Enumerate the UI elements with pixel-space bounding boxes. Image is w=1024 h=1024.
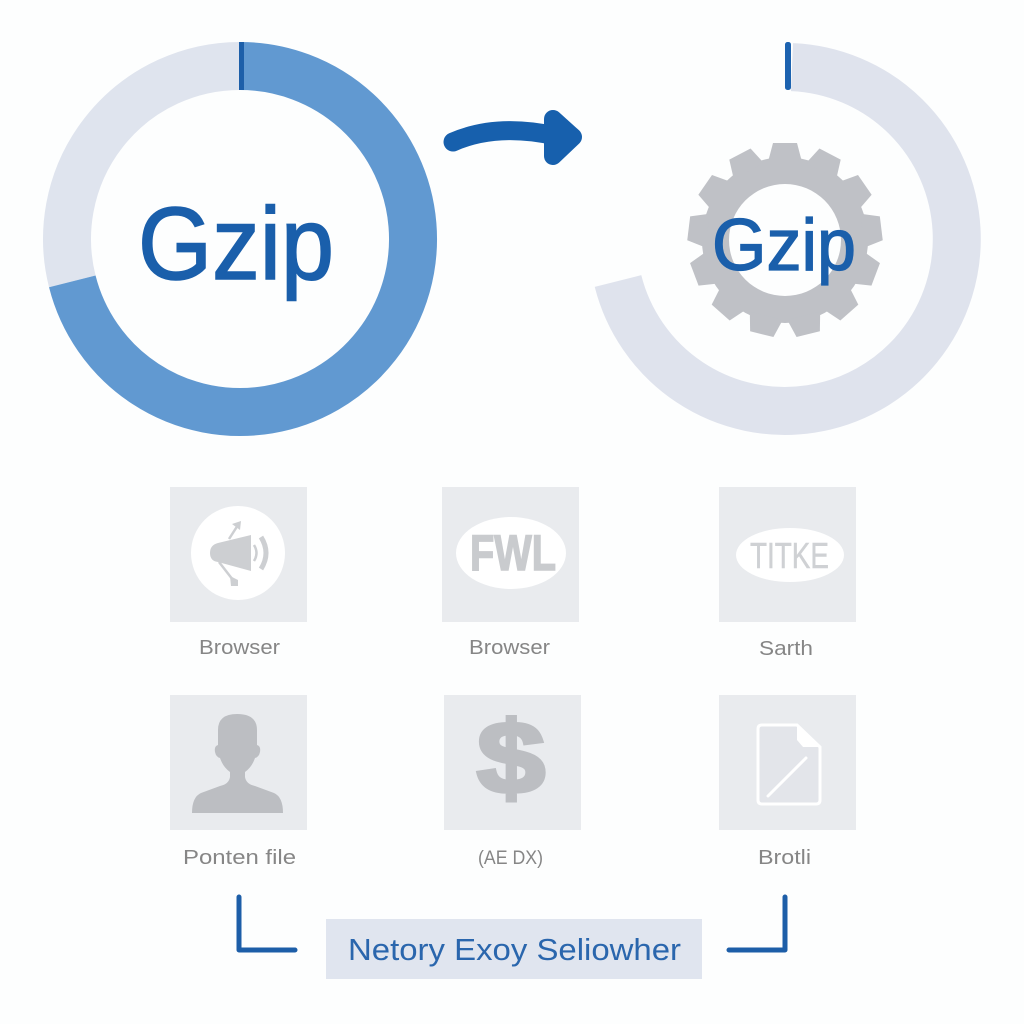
panel: right donut with gear — [618, 42, 957, 411]
icon: person — [192, 714, 283, 813]
donut remainder arc — [67, 66, 240, 281]
icon: document — [758, 725, 821, 804]
donut compressed share arc — [72, 66, 413, 412]
panel: card AE DX — [444, 695, 581, 869]
icon text: TITKE: TITKE — [750, 535, 829, 576]
panel: card Browser speaker — [170, 487, 307, 659]
panel: card Ponten file — [170, 695, 307, 869]
caption text: Netory Exoy Seliowher — [348, 932, 681, 967]
left bracket — [239, 897, 295, 950]
label: Ponten file — [183, 847, 296, 869]
right donut start marker — [785, 42, 791, 90]
caption box — [326, 919, 702, 979]
panel: left donut with Gzip — [67, 42, 413, 412]
icon: gear — [687, 143, 883, 338]
label: Brotli — [758, 847, 811, 869]
label: Browser — [469, 637, 550, 659]
icon text: FWL: FWL — [470, 525, 556, 581]
arrow: left to right — [453, 119, 573, 156]
right donut arc — [618, 67, 957, 411]
donut start marker — [239, 42, 244, 90]
panel: card Browser FWL — [442, 487, 579, 659]
panel: card Brotli — [719, 695, 856, 869]
left donut label: Gzip — [138, 186, 334, 301]
icon: speaker — [210, 521, 266, 586]
label: Browser — [199, 637, 280, 659]
panel: card Sarth TITKE — [719, 487, 856, 660]
right bracket — [729, 897, 785, 950]
label: Sarth — [759, 638, 813, 660]
right donut label: Gzip — [712, 205, 856, 286]
label: (AE DX) — [478, 848, 543, 869]
icon: dollar: $ — [477, 701, 545, 815]
